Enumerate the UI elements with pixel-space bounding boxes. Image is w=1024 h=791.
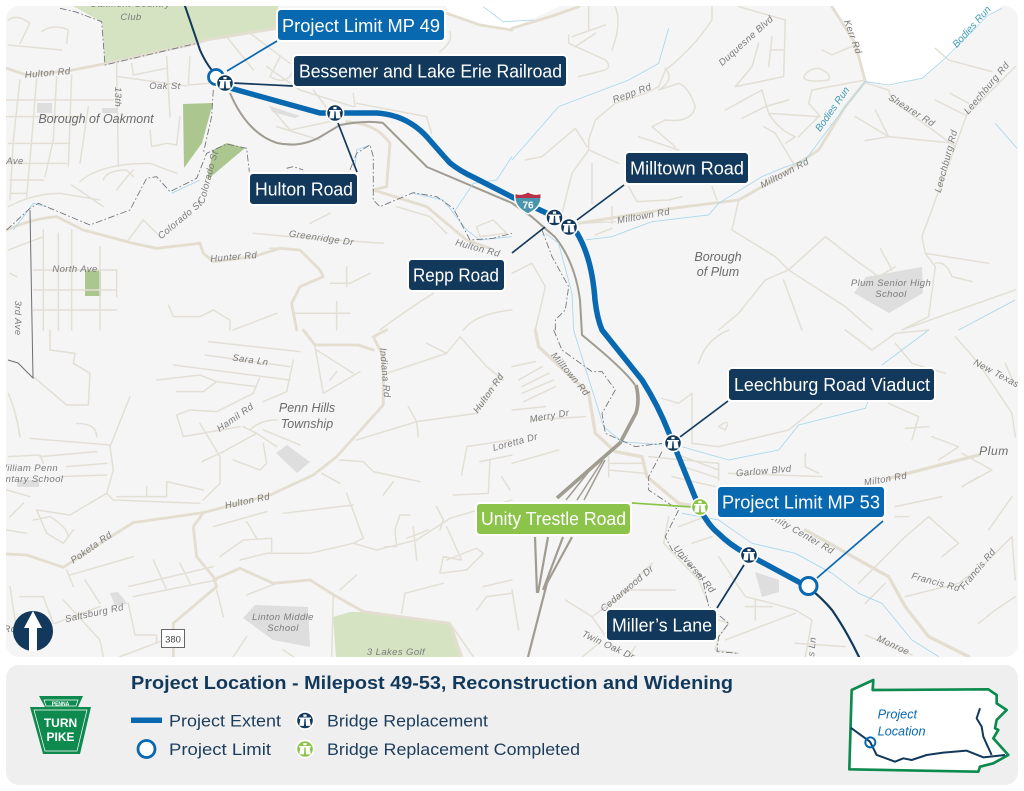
road and place names: Bodies Run: [951, 4, 994, 50]
road and place names: Milton Rd: [863, 470, 908, 489]
road and place names: Hulton Rd: [454, 237, 502, 260]
project extent: turnpike route: [185, 6, 859, 657]
road and place names: Milltown Rd: [616, 206, 671, 227]
road and place names: School: [267, 623, 299, 634]
label: Milltown Road: [625, 152, 749, 184]
road and place names: Francis Rd: [958, 546, 999, 592]
label: Repp Road: Repp Road: [413, 266, 499, 286]
logo: PA Turnpike keystone: TURN: [44, 716, 77, 730]
road and place names: Shearer Rd: [886, 92, 937, 130]
road and place names: Hamil Rd: [215, 401, 256, 435]
road and place names: Loretta Dr: [492, 431, 540, 454]
label: Bessemer and Lake Erie Railroad: Bessemer and Lake Erie Railroad: [299, 62, 562, 82]
road and place names: Township: [281, 417, 333, 431]
road and place names: Kerr Rd: [841, 19, 864, 56]
road and place names: Hunter Rd: [210, 250, 258, 265]
north arrow: [13, 611, 53, 651]
label: Leechburg Road Viaduct: Leechburg Road Viaduct: [734, 375, 930, 395]
road and place names: Plum Senior High: [851, 278, 931, 289]
road and place names: Hulton Rd: [471, 371, 507, 416]
outside area: white top right: [447, 6, 1002, 86]
road and place names: Universal Rd: [671, 543, 717, 596]
label: Miller's Lane: Miller’s Lane: [612, 616, 712, 636]
label: Project Limit MP 49: Project Limit MP 49: [282, 16, 440, 36]
label: Leechburg Road Viaduct: [728, 368, 935, 401]
road and place names: 3 Lakes Golf: [367, 647, 426, 658]
road and place names: Francis Rd: [910, 571, 961, 594]
road and place names: Cedarwood Dr: [599, 563, 657, 615]
label: Hulton Road: [249, 173, 358, 205]
road and place names: Indiana Rd: [377, 347, 392, 398]
railway lines: [230, 93, 638, 657]
road and place names: Colorado St: [196, 150, 221, 205]
label: Repp Road: [408, 259, 505, 291]
road and place names: Hulton Rd: [24, 66, 71, 81]
road and place names: Merry Dr: [529, 408, 571, 425]
municipal boundaries: [7, 8, 739, 653]
road and place names: Oak St: [149, 81, 181, 92]
legend: project extent: Project Extent: [169, 712, 281, 730]
road and place names: Penn Hills: [279, 401, 335, 415]
road and place names: Colorado St: [156, 198, 205, 242]
locator map: Pennsylvania: Project: [878, 708, 918, 722]
interstate 76 shield: 76: [522, 200, 534, 212]
legend: bridge replacement: Bridge Replacement: [327, 712, 488, 730]
road and place names: New Texas: [971, 357, 1021, 390]
road and place names: Monroe: [875, 633, 911, 658]
road and place names: 3rd Ave: [12, 300, 23, 336]
road and place names: Milltown Rd: [549, 350, 592, 399]
road and place names: Club: [120, 12, 142, 23]
logo: PA Turnpike keystone: [30, 696, 91, 754]
roads: north east: [512, 7, 1015, 330]
legend title: Project Location - Milepost 49-53, Reconstruction and Widening: [131, 673, 733, 693]
road and place names: of Plum: [697, 265, 739, 279]
road and place names: Sara Ln: [232, 353, 269, 368]
project limit marker MP 53: [800, 578, 817, 594]
road and place names: Ave: [5, 156, 24, 167]
road and place names: Twin Oak Dr: [580, 629, 636, 663]
road and place names: Leechburg Rd: [933, 128, 960, 194]
road and place names: Duquesne Blvd: [717, 14, 776, 69]
label: Project Limit MP 49: [277, 9, 445, 41]
legend: project limit: Project Limit: [169, 740, 271, 759]
road and place names: 13th: [112, 87, 123, 107]
school and parking grounds: [17, 103, 923, 647]
road and place names: Hulton Rd: [224, 491, 271, 512]
parks: [73, 6, 460, 657]
roads: south west: [7, 330, 512, 657]
leader lines: [227, 41, 883, 608]
label: Milltown Road: Milltown Road: [630, 158, 744, 178]
label: Miller's Lane: [606, 609, 717, 641]
road and place names: Poketa Rd: [69, 530, 115, 566]
roads: north west: [7, 13, 512, 330]
road and place names: Bodies Run: [814, 85, 853, 134]
project limit marker MP 49: [208, 70, 224, 84]
road and place names: Garlow Blvd: [736, 464, 792, 479]
label: Unity Trestle Road: [476, 503, 631, 535]
highway shield: route 380: 380: [165, 634, 181, 646]
label: Hulton Road: Hulton Road: [255, 180, 353, 200]
roads: south east: [512, 330, 1015, 660]
interstate 76 shield: [515, 192, 541, 214]
logo: PA Turnpike keystone: PENNA: [52, 702, 70, 708]
legend: bridge replacement completed: Bridge Replacement Completed: [327, 740, 580, 759]
road and place names: Greenridge Dr: [288, 229, 355, 249]
road and place names: Leechburg Rd: [962, 60, 1012, 117]
locator map: Pennsylvania: Location: [878, 724, 926, 738]
label: Unity Trestle Road: Unity Trestle Road: [481, 509, 626, 529]
road and place names: Linton Middle: [252, 612, 314, 623]
label: Bessemer and Lake Erie Railroad: [293, 55, 567, 87]
road and place names: Plum: [979, 444, 1009, 458]
road and place names: School: [875, 289, 907, 300]
panel: legend: [6, 665, 1018, 785]
label: Project Limit MP 53: Project Limit MP 53: [722, 492, 880, 512]
road and place names: s Ln: [806, 637, 819, 657]
road and place names: Repp Rd: [611, 81, 653, 106]
road and place names: Borough of Oakmont: [38, 112, 154, 126]
bridge icons: [216, 74, 758, 564]
road and place names: North Ave: [52, 264, 98, 275]
road and place names: Milltown Rd: [759, 156, 811, 191]
road and place names: Unity Center Rd: [767, 511, 836, 557]
locator map: Pennsylvania: [849, 680, 1008, 772]
highway shield: route 380: [162, 630, 184, 648]
road and place names: Borough: [694, 250, 742, 264]
road and place names: Saltsburg Rd: [64, 602, 125, 625]
logo: PA Turnpike keystone: PIKE: [46, 730, 75, 744]
road and place names: Rd: [4, 624, 17, 635]
label: Project Limit MP 53: [717, 486, 885, 518]
